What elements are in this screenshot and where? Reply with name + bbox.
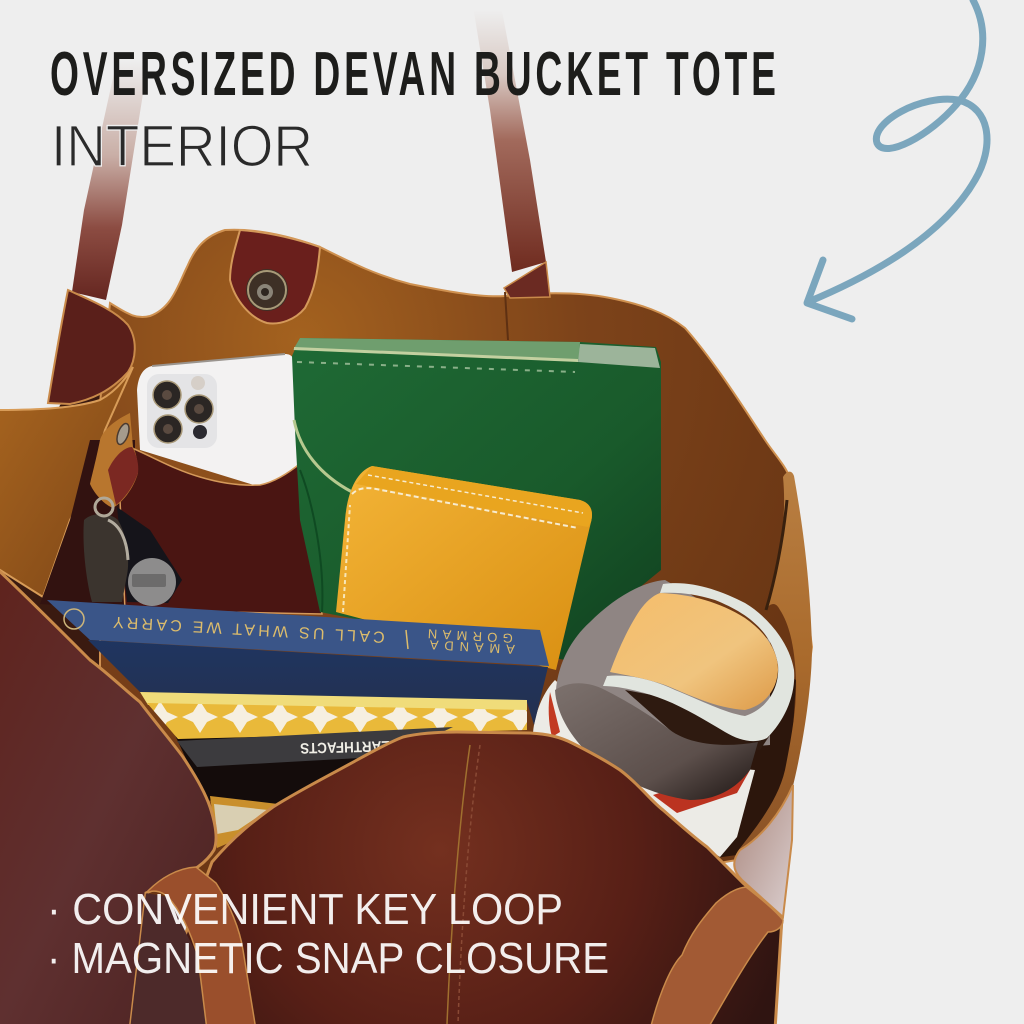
flap center seam: [447, 745, 470, 1024]
mug hole shadow: [625, 690, 770, 750]
zipper pocket: [210, 796, 278, 848]
subtitle: INTERIOR: [51, 114, 313, 179]
mug white body: [533, 680, 755, 857]
pale outer leather panel: [734, 785, 793, 917]
bag interior suede: [100, 230, 812, 900]
backing behind left side of bag: [0, 350, 140, 900]
bullet list: [47, 885, 609, 983]
hardcover book: Call Us What We Carry: CALL US WHAT WE CARRY: [112, 613, 385, 645]
dark book: Earthfacts: [177, 727, 453, 767]
title: OVERSIZED DEVAN BUCKET TOTE: [50, 39, 776, 108]
left front flap: [0, 567, 216, 1024]
left outer leather corner: [48, 290, 135, 404]
crease in right interior: [505, 292, 508, 340]
red-brown interior pocket: [120, 448, 322, 614]
keys and tag: [83, 498, 182, 606]
right shoulder strap: [472, 0, 546, 272]
lower right outer panel: [690, 885, 783, 1024]
front flap: [150, 732, 782, 1024]
lower left back panel: [130, 893, 207, 1024]
right front handle: [650, 887, 783, 1024]
snap tab with magnetic snap: [230, 230, 320, 323]
smartphone: [137, 354, 304, 490]
yellow leather wallet: [336, 466, 592, 670]
hardcover book: Call Us What We Carry: [47, 600, 549, 725]
left inner suede panel: [0, 367, 133, 597]
left shoulder strap: [72, 0, 158, 300]
right strap tab: [504, 262, 550, 298]
yellow patterned book: [140, 692, 527, 739]
key loop: [90, 413, 138, 508]
travel mug: [533, 580, 794, 857]
black area under books: [175, 726, 460, 808]
crease shadow: [766, 500, 787, 610]
dark cavity behind keys: [40, 440, 135, 610]
mug white ring: [603, 583, 794, 741]
right outer leather strip: [737, 472, 812, 852]
mug dark sleeve: [555, 683, 758, 800]
mug orange lid: [610, 593, 778, 710]
mug red accents: [549, 692, 560, 737]
left front handle: [146, 867, 256, 1024]
bullet list: · CONVENIENT KEY LOOP: [47, 885, 563, 934]
icon: blue curly arrow: [807, 0, 987, 319]
green leather notebook: [292, 338, 661, 660]
dark shadow beside mug: [700, 660, 796, 860]
mug grey lid base: [556, 580, 770, 750]
bullet list: · MAGNETIC SNAP CLOSURE: [47, 934, 609, 983]
hardcover book: Call Us What We Carry: AMANDA: [429, 637, 515, 657]
hardcover book: Call Us What We Carry: GORMAN: [427, 626, 513, 646]
dark book: Earthfacts: EARTHFACTS: [300, 737, 390, 756]
